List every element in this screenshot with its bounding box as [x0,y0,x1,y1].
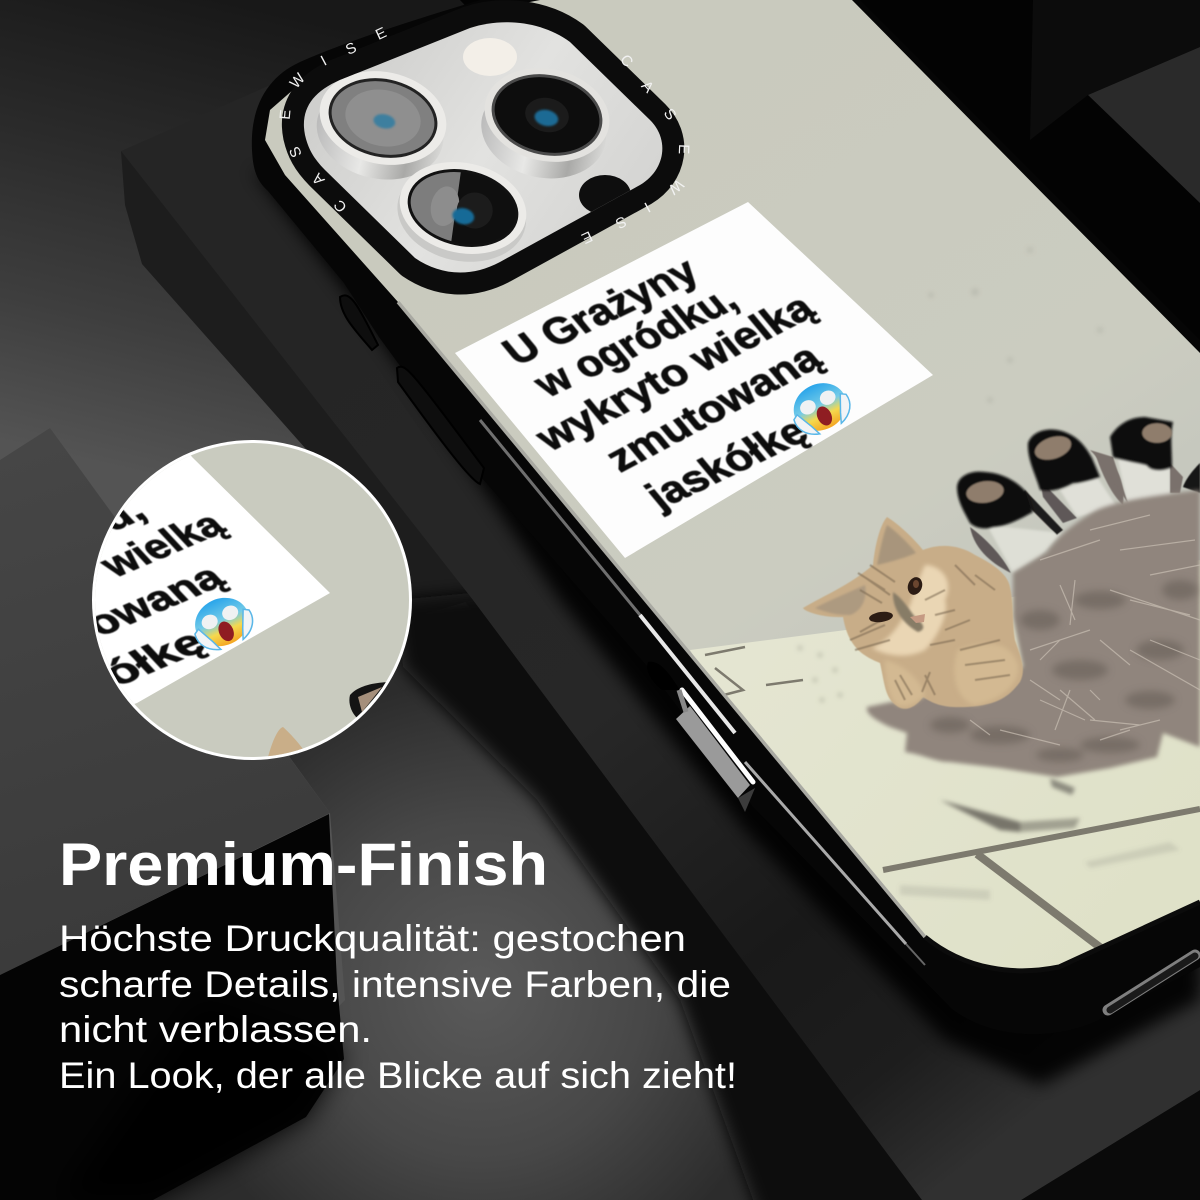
nest [867,490,1200,777]
bird 3 [1090,417,1200,503]
ring brand lettering: I [318,53,330,70]
ring brand lettering: A [309,170,328,188]
ring brand lettering: S [613,212,629,232]
ring brand lettering: E [373,24,389,44]
body text: Ein Look, der alle Blicke auf sich zieht! [59,1055,737,1096]
background: block at top right [1088,47,1200,203]
ring brand lettering: S [660,105,680,123]
lens: upper left [316,71,446,180]
bird 2 [1028,430,1123,523]
card caption: w ogródku, [523,277,746,405]
inset caption: u, [88,491,155,539]
floor lines [705,647,1200,948]
blurred shadows on floor [900,778,1180,900]
icon: screaming face emoji [793,383,851,435]
phone case body [252,0,1200,1034]
ring brand lettering: E [675,144,692,154]
phone screen artwork [240,0,1200,1000]
lens: upper right [481,74,609,178]
side buttons [340,295,755,812]
inset magnifier circle [76,440,420,760]
card caption: jaskółkę [635,409,817,517]
screen bevel and glossy rim highlights [398,302,1200,971]
phone case shadow [252,170,1200,1085]
floor [690,560,1200,1000]
ring brand lettering: C [616,51,636,71]
icon: inset screaming face emoji [194,598,254,650]
sensor hole [579,175,631,215]
ring brand lettering: W [287,69,309,92]
inset caption: owaną [76,557,234,644]
inset cat ear [268,727,302,756]
ring and window [304,22,662,273]
flash [463,38,517,76]
card caption: wykryto wielką [525,285,824,459]
white text card [455,202,933,558]
body text: scharfe Details, intensive Farben, die [59,964,731,1005]
inset caption: wielką [90,505,234,585]
cat eyes and nose [908,577,922,595]
ring brand lettering: S [286,144,306,160]
inset caption: ółkę [93,622,215,694]
ring brand lettering [277,24,692,247]
bottom speaker slot [1108,955,1195,1010]
ring brand lettering: W [664,175,687,198]
heading: Premium-Finish [59,831,548,898]
inset caption [96,510,232,684]
card caption [493,249,831,517]
body text: Höchste Druckqualität: gestochen [59,918,686,959]
camera bump [277,22,692,273]
ring brand lettering: A [638,78,657,96]
ring brand lettering: E [579,227,595,247]
silver side button [676,706,750,798]
cat [803,517,1023,709]
ring brand lettering: S [343,39,359,59]
cat fur strokes [850,565,1010,700]
ring brand lettering: C [330,196,351,216]
ring brand lettering: I [641,198,653,215]
inset bird fragment [349,682,388,718]
body text: nicht verblassen. [59,1009,372,1050]
card caption: zmutowaną [596,335,831,480]
floor specks [797,645,843,703]
card caption: U Grażyny [493,249,707,373]
inset white card [95,456,330,704]
bird 1 [957,472,1063,573]
ring brand lettering: E [277,109,294,120]
background: small block at left [0,428,344,1200]
body text [59,918,737,1096]
wall smudges [928,247,1103,403]
lens: bottom [398,162,526,262]
